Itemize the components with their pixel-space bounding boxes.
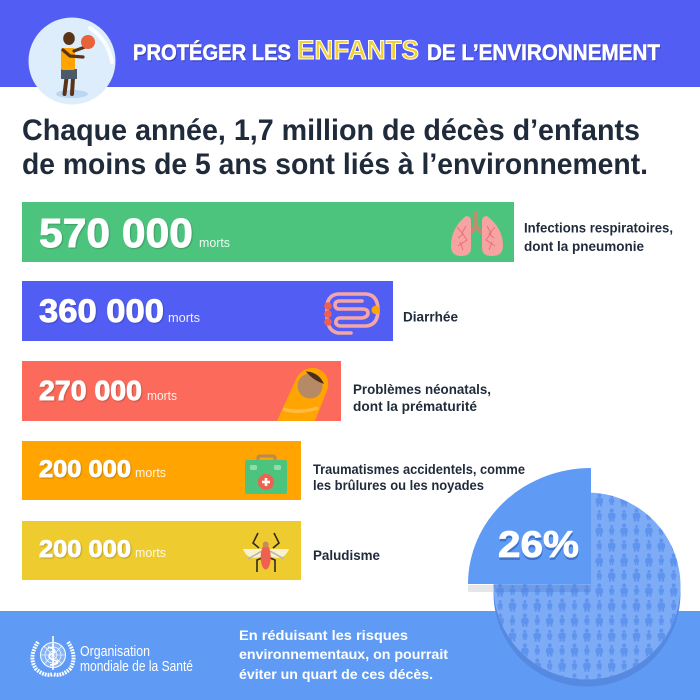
bar: diarrhoea: morts xyxy=(168,311,200,325)
label: accidental injuries xyxy=(313,462,525,493)
header title: DE L’ENVIRONNEMENT xyxy=(427,40,661,65)
label: accidental injuries: Traumatismes accidentels, comme xyxy=(313,462,525,477)
main heading: de moins de 5 ans sont liés à l’environnement. xyxy=(22,148,648,181)
footer text xyxy=(239,627,448,682)
bar: malaria: morts xyxy=(135,546,166,560)
footer text: En réduisant les risques xyxy=(239,627,408,643)
header title: PROTÉGER LES xyxy=(134,42,292,66)
footer band xyxy=(0,611,700,700)
bar: malaria: 200 000 xyxy=(39,536,131,563)
main heading: Chaque année, 1,7 million de décès d’enfants xyxy=(22,114,640,147)
label: respiratory infections: dont la pneumonie xyxy=(524,239,644,254)
icon: mosquito xyxy=(243,533,289,572)
main heading xyxy=(22,114,648,181)
label: respiratory infections xyxy=(524,220,673,254)
header title: DE L’ENVIRONNEMENT xyxy=(428,42,662,66)
label: respiratory infections: Infections respiratoires, xyxy=(524,220,673,236)
pie chart: 26%: 26% xyxy=(498,526,580,568)
bar: respiratory infections: 570 000 xyxy=(39,210,193,256)
bar: diarrhoea: 360 000 xyxy=(39,293,164,329)
footer text: éviter un quart de ces décès. xyxy=(239,666,433,682)
icon: first aid kit xyxy=(245,456,287,494)
label: neonatal: Problèmes néonatals, xyxy=(353,382,491,397)
header title xyxy=(133,35,662,66)
pie chart: 26% xyxy=(468,468,680,686)
icon: WHO emblem xyxy=(32,636,74,675)
icon: child in bubble xyxy=(28,18,116,104)
bar: neonatal: morts xyxy=(147,389,177,403)
footer text: environnementaux, on pourrait xyxy=(239,646,448,662)
WHO logo: Organisation xyxy=(80,643,150,660)
icon: intestine xyxy=(324,294,380,333)
header title: PROTÉGER LES xyxy=(133,40,291,65)
bar: accidental injuries: morts xyxy=(135,466,166,480)
bar: respiratory infections xyxy=(22,202,514,262)
header title: ENFANTS xyxy=(297,35,419,65)
label: neonatal xyxy=(353,382,491,414)
label: malaria: Paludisme xyxy=(313,548,380,563)
bar: respiratory infections: morts xyxy=(199,236,230,250)
bar: neonatal: 270 000 xyxy=(39,375,142,406)
icon: baby finger xyxy=(277,368,328,421)
label: diarrhoea: Diarrhée xyxy=(403,310,458,324)
bar: diarrhoea xyxy=(22,281,393,341)
bar: malaria xyxy=(22,521,301,580)
bar: neonatal xyxy=(22,361,341,421)
icon: lungs xyxy=(451,212,503,256)
WHO logo: mondiale de la Santé xyxy=(80,658,193,675)
bar: accidental injuries xyxy=(22,441,301,500)
label: accidental injuries: les brûlures ou les noyades xyxy=(313,478,484,493)
bar: accidental injuries: 200 000 xyxy=(39,456,131,483)
WHO logo xyxy=(32,636,193,675)
header banner xyxy=(0,0,700,87)
pie chart: 26%: 26% xyxy=(498,524,579,565)
label: neonatal: dont la prématurité xyxy=(353,399,477,414)
